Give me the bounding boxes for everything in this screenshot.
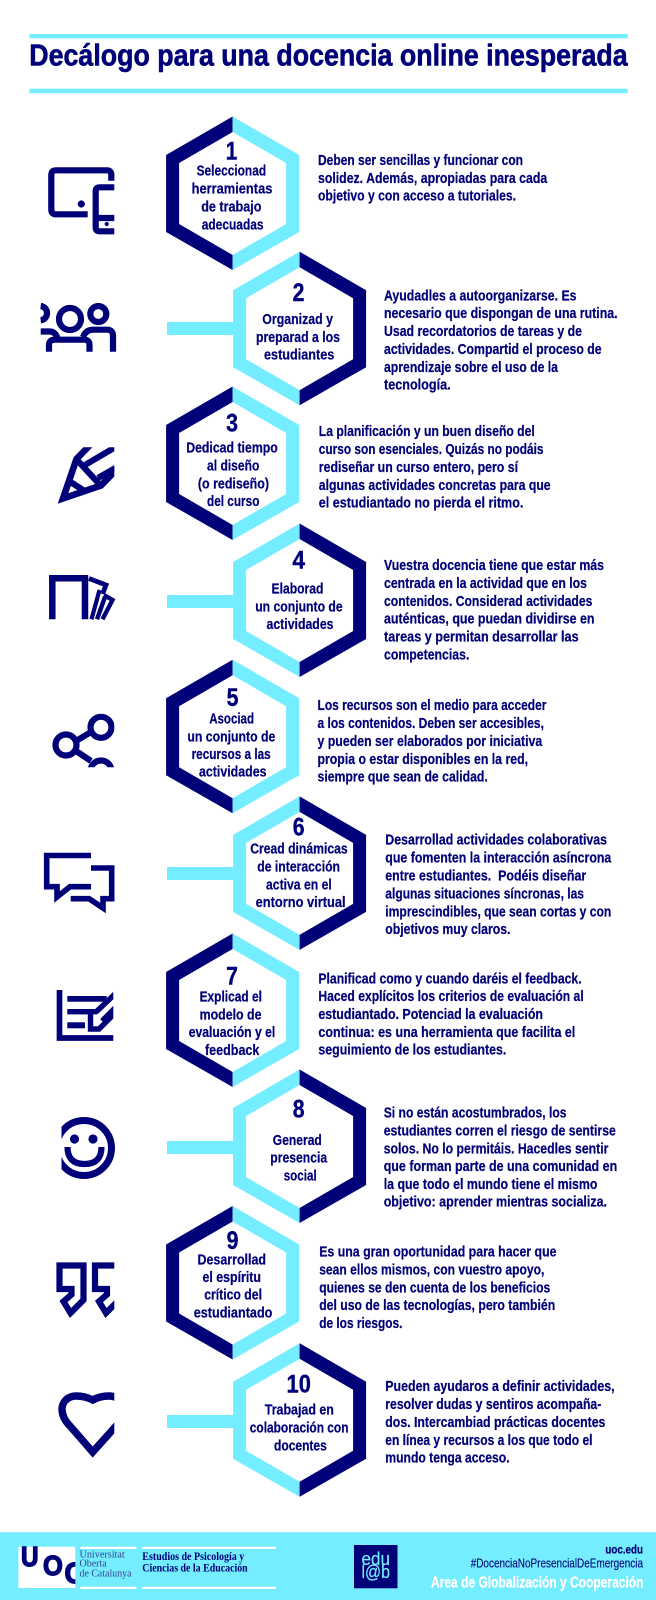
icon: pencil	[63, 444, 120, 498]
logo: UOC: O	[43, 1550, 63, 1581]
hexagon 8	[233, 1070, 366, 1223]
number 4: 4	[292, 546, 305, 574]
university name: Oberta	[80, 1559, 107, 1570]
description 8: la que todo el mundo tiene el mismo	[384, 1177, 598, 1193]
heading 4: Elaborad	[272, 581, 323, 597]
step 1	[51, 116, 548, 270]
description 8	[384, 1106, 617, 1210]
description 6: imprescindibles, que sean cortas y con	[385, 904, 611, 920]
icon: share nodes	[56, 717, 112, 782]
hexagon 2	[233, 252, 366, 405]
description 7: estudiantado. Potenciad la evaluación	[318, 1007, 543, 1023]
description 2: Ayudadles a autoorganizarse. Es	[384, 288, 576, 304]
description 6: Desarrollad actividades colaborativas	[385, 833, 607, 849]
icon: quotation marks	[60, 1266, 119, 1313]
description 1	[318, 153, 548, 205]
heading 10: docentes	[274, 1438, 327, 1454]
heading 3: del curso	[207, 494, 259, 510]
logo: edulab	[354, 1545, 398, 1588]
step 5	[56, 660, 547, 813]
hexagon 3	[166, 386, 299, 540]
heading 7: evaluación y el	[189, 1025, 275, 1041]
description 3: La planificación y un buen diseño del	[319, 424, 535, 440]
description 1: objetivo y con acceso a tutoriales.	[318, 189, 516, 205]
heading 9	[194, 1252, 272, 1322]
department name: Estudios de Psicología y	[142, 1549, 244, 1563]
description 2: actividades. Compartid el proceso de	[384, 342, 602, 358]
step 7	[60, 934, 584, 1087]
description 6: que fomenten la interacción asíncrona	[385, 851, 612, 867]
logo: UOC: C	[64, 1558, 85, 1590]
footer credits: uoc.edu	[605, 1542, 643, 1556]
description 9: del uso de las tecnologías, pero también	[319, 1298, 555, 1314]
icon: smiley	[56, 1120, 112, 1176]
hexagon 5	[166, 660, 299, 813]
description 6: entre estudiantes. Podéis diseñar	[385, 868, 586, 884]
description 5: a los contenidos. Deben ser accesibles,	[318, 716, 544, 732]
number 5: 5	[227, 684, 238, 712]
icon: documents	[52, 578, 112, 619]
description 5: siempre que sean de calidad.	[318, 770, 488, 786]
description 9: Es una gran oportunidad para hacer que	[319, 1245, 556, 1261]
description 4: auténticas, que puedan dividirse en	[384, 612, 595, 628]
connector 8	[167, 1141, 234, 1154]
number 6: 6	[293, 814, 305, 842]
number 7: 7	[226, 962, 238, 990]
hexagon 1	[166, 116, 299, 270]
department name	[142, 1547, 276, 1589]
description 1: solidez. Además, apropiadas para cada	[318, 171, 548, 187]
description 6: objetivos muy claros.	[385, 922, 510, 938]
heading 8: social	[284, 1168, 317, 1184]
heading 8: presencia	[270, 1151, 328, 1167]
step 3	[63, 386, 551, 540]
heading 7: modelo de	[200, 1007, 262, 1023]
icon: tablet and phone	[51, 170, 114, 231]
hexagon 6	[233, 796, 366, 950]
hexagon 4	[233, 524, 366, 677]
number 1: 1	[226, 138, 237, 166]
description 5: propia o estar disponibles en la red,	[318, 752, 528, 768]
description 9	[319, 1245, 556, 1332]
description 4: competencias.	[384, 648, 469, 664]
description 4: centrada en la actividad que en los	[384, 576, 587, 592]
heading 1: adecuadas	[202, 217, 264, 233]
heading 1: Seleccionad	[197, 164, 266, 180]
heading 8: Generad	[273, 1133, 322, 1149]
description 2: aprendizaje sobre el uso de la	[384, 360, 559, 376]
description 1: Deben ser sencillas y funcionar con	[318, 153, 523, 169]
heading 3: (o rediseño)	[198, 476, 269, 492]
description 7: continua: es una herramienta que facilita el	[318, 1025, 575, 1041]
heading 10	[250, 1403, 349, 1454]
description 5: Los recursos son el medio para acceder	[318, 698, 547, 714]
heading 3: Dedicad tiempo	[186, 441, 278, 457]
connector 2	[167, 322, 234, 335]
number 9: 9	[227, 1227, 238, 1255]
description 7: Haced explícitos los criterios de evaluación al	[318, 989, 584, 1005]
number 8: 8	[293, 1096, 305, 1124]
logo: UOC: U	[21, 1541, 38, 1572]
icon: heart	[62, 1396, 124, 1452]
step 8	[56, 1070, 617, 1223]
description 8: solos. No lo permitáis. Hacedles sentir	[384, 1141, 609, 1157]
logo: edulab: l@b	[362, 1561, 390, 1582]
heading 2	[256, 312, 340, 364]
description 3: rediseñar un curso entero, pero sí	[319, 460, 519, 476]
connector 4	[167, 595, 234, 608]
logo: edulab: edu	[362, 1548, 390, 1569]
heading 4	[255, 581, 343, 633]
description 8: objetivo: aprender mientras socializa.	[384, 1194, 607, 1210]
footer	[0, 1532, 656, 1600]
heading 7: feedback	[205, 1043, 260, 1059]
step 4	[52, 524, 604, 677]
university name: de Catalunya	[80, 1568, 132, 1579]
description 9: quienes se den cuenta de los beneficios	[319, 1280, 550, 1296]
heading 9: el espíritu	[202, 1270, 261, 1286]
heading 10: Trabajad en	[265, 1403, 334, 1419]
hexagon 7	[166, 934, 299, 1087]
description 9: de los riesgos.	[319, 1316, 402, 1332]
hexagon 10	[233, 1343, 366, 1497]
step 2	[41, 252, 618, 405]
number 10: 10	[287, 1371, 311, 1399]
heading 7: Explicad el	[200, 990, 262, 1006]
number 3: 3	[226, 410, 238, 438]
heading 9: Desarrollad	[198, 1252, 266, 1268]
description 5	[318, 698, 547, 786]
description 8: estudiantes corren el riesgo de sentirse	[384, 1124, 616, 1140]
number 2: 2	[293, 279, 304, 307]
title with rules	[29, 34, 629, 93]
heading 6: de interacción	[257, 859, 340, 875]
description 10: resolver dudas y sentiros acompaña-	[385, 1397, 601, 1413]
footer credits	[431, 1542, 644, 1592]
heading 8	[270, 1133, 328, 1184]
heading 2: estudiantes	[264, 348, 334, 364]
heading 3: al diseño	[207, 459, 259, 475]
description 4: tareas y permitan desarrollar las	[384, 630, 579, 646]
description 3	[319, 424, 551, 512]
department name: Ciencias de la Educación	[142, 1561, 248, 1575]
icon: checklist and pencil	[60, 990, 116, 1038]
university name	[80, 1547, 136, 1589]
heading 1: herramientas	[192, 182, 272, 198]
step 6	[47, 796, 612, 950]
university name: Universitat	[80, 1550, 125, 1561]
description 5: y pueden ser elaborados por iniciativa	[318, 734, 543, 750]
icon: people	[41, 306, 113, 352]
step 9	[60, 1206, 556, 1360]
heading 5	[187, 711, 275, 781]
description 3: el estudiantado no pierda el ritmo.	[319, 496, 523, 512]
step 10	[62, 1343, 615, 1497]
heading 6: entorno virtual	[256, 895, 346, 911]
description 2: tecnología.	[384, 378, 451, 394]
heading 9: crítico del	[204, 1288, 262, 1304]
description 7: Planificad como y cuando daréis el feedback.	[318, 971, 582, 987]
description 7	[318, 971, 584, 1059]
heading 2: Organizad y	[262, 312, 334, 328]
description 9: sean ellos mismos, con vuestro apoyo,	[319, 1262, 544, 1278]
description 4: Vuestra docencia tiene que estar más	[384, 558, 604, 574]
description 7: seguimiento de los estudiantes.	[318, 1043, 506, 1059]
heading 5: actividades	[199, 765, 266, 781]
heading 5: recursos a las	[192, 747, 271, 763]
heading 3	[186, 441, 278, 510]
description 8: Si no están acostumbrados, los	[384, 1106, 566, 1122]
heading 5: Asociad	[209, 711, 254, 727]
heading 7	[189, 990, 275, 1059]
heading 9: estudiantado	[194, 1306, 272, 1322]
heading 1	[192, 164, 272, 233]
connector 10	[167, 1415, 234, 1428]
icon: chat bubbles	[47, 856, 112, 908]
heading 4: actividades	[266, 617, 334, 633]
description 4	[384, 558, 604, 664]
description 10	[385, 1379, 615, 1467]
heading 5: un conjunto de	[187, 729, 275, 745]
heading 2: preparad a los	[256, 330, 340, 346]
description 2: necesario que dispongan de una rutina.	[384, 306, 618, 322]
description 8: que forman parte de una comunidad en	[384, 1159, 617, 1175]
heading 10: colaboración con	[250, 1420, 349, 1436]
heading 4: un conjunto de	[255, 599, 343, 615]
description 2: Usad recordatorios de tareas y de	[384, 324, 582, 340]
heading 6	[250, 842, 348, 911]
description 3: algunas actividades concretas para que	[319, 478, 551, 494]
description 4: contenidos. Considerad actividades	[384, 594, 592, 610]
description 3: curso son esenciales. Quizás no podáis	[319, 442, 544, 458]
description 2	[384, 288, 618, 394]
description 6: algunas situaciones síncronas, las	[385, 886, 584, 902]
description 6	[385, 833, 612, 938]
description 10: dos. Intercambiad prácticas docentes	[385, 1415, 605, 1431]
description 10: Pueden ayudaros a definir actividades,	[385, 1379, 615, 1395]
heading 6: Cread dinámicas	[250, 842, 348, 858]
hexagon 9	[166, 1206, 299, 1360]
heading 1: de trabajo	[201, 200, 262, 216]
connector 6	[167, 867, 234, 880]
description 10: mundo tenga acceso.	[385, 1451, 510, 1467]
heading 6: activa en el	[266, 877, 332, 893]
description 10: en línea y recursos a los que todo el	[385, 1433, 592, 1449]
logo: UOC	[18, 1546, 76, 1588]
